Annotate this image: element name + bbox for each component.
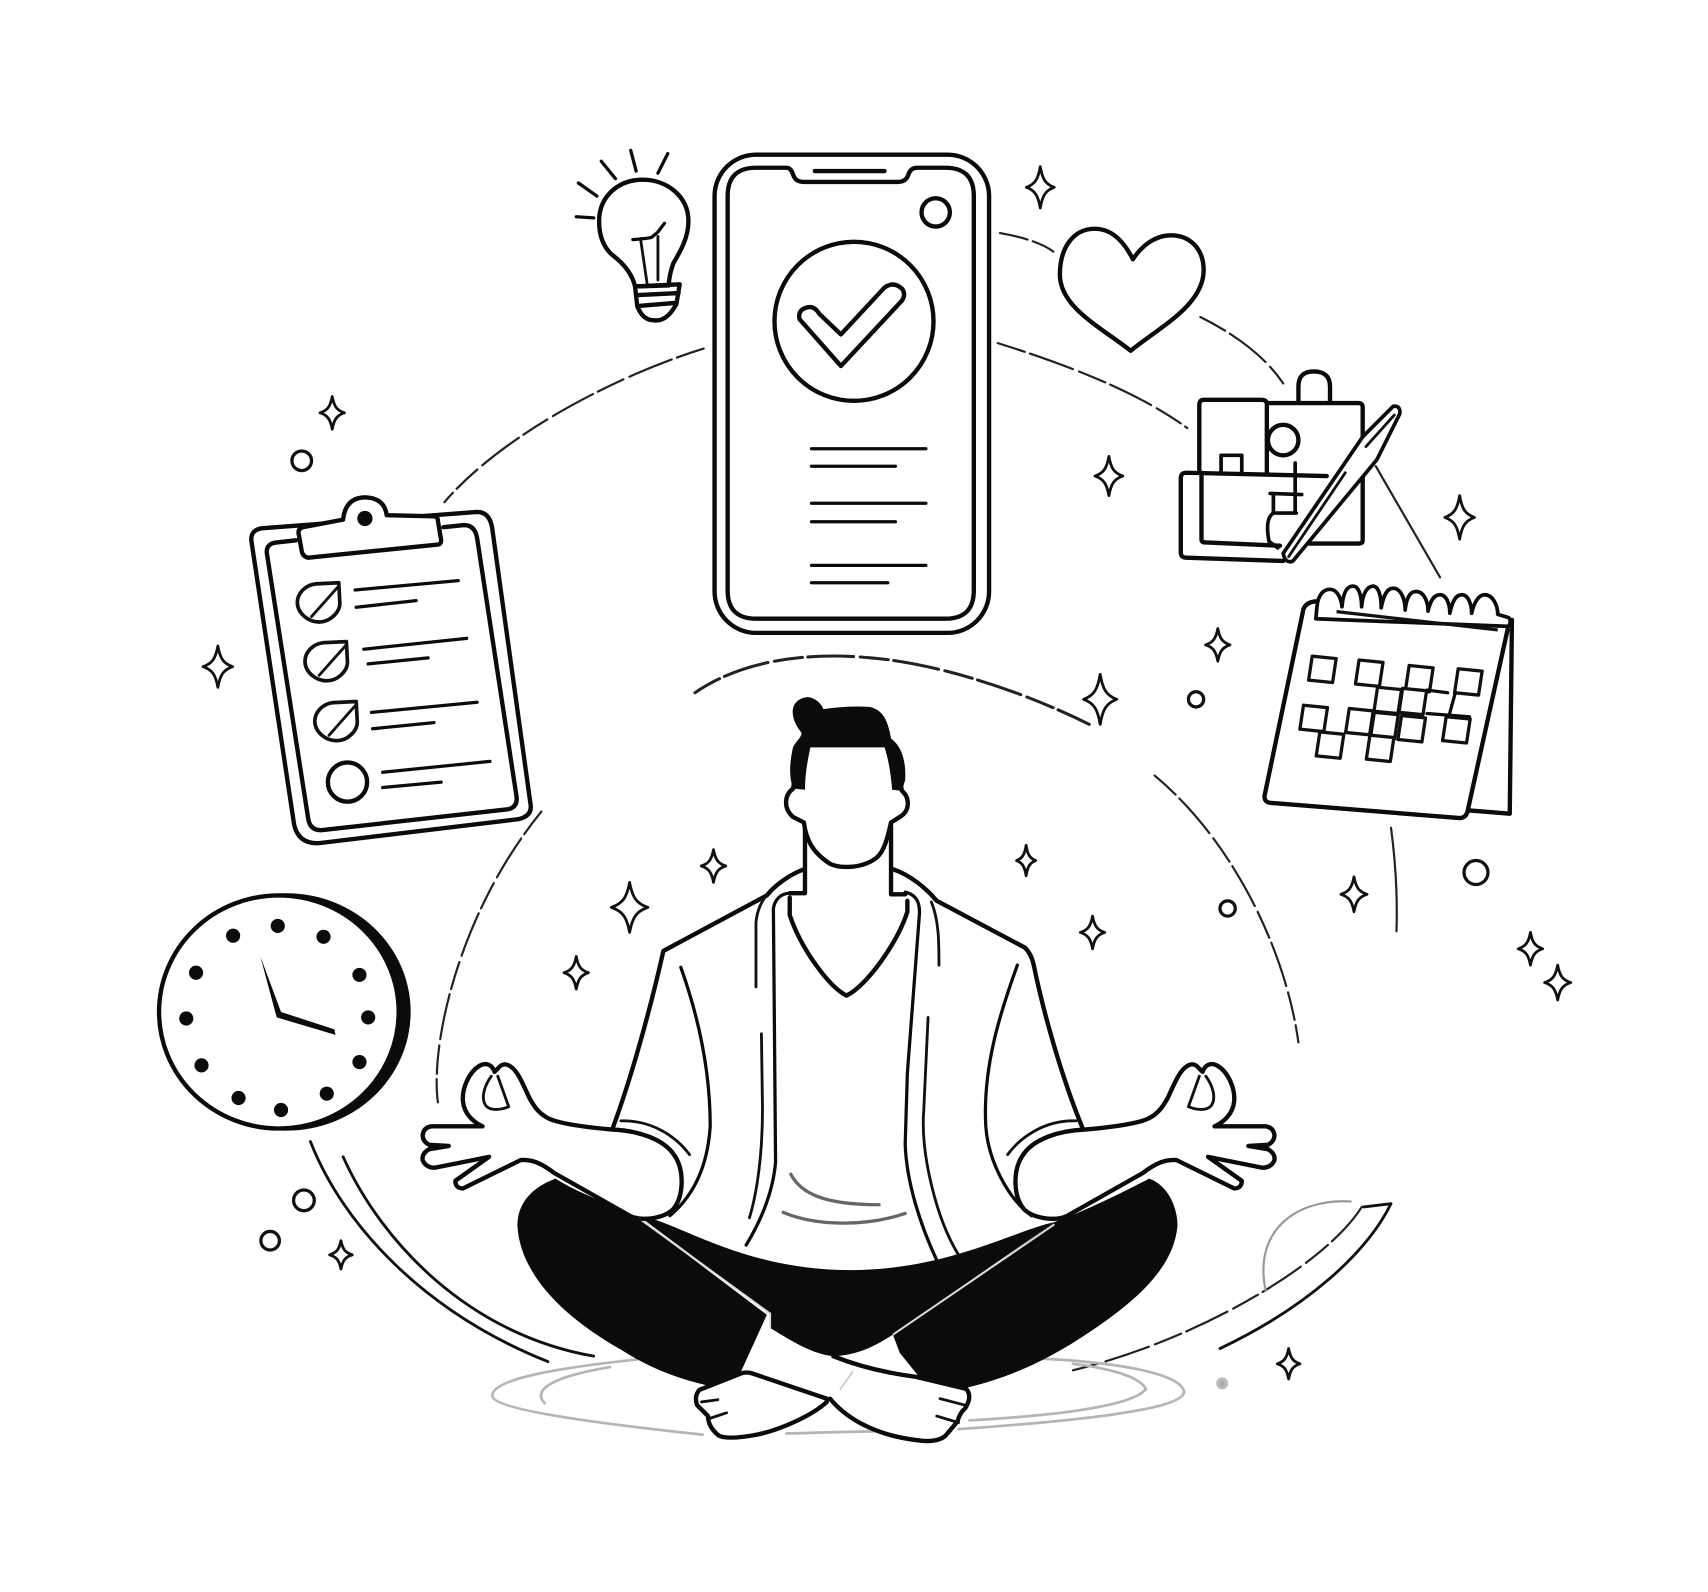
icon: light bulb bbox=[576, 150, 688, 320]
connecting dashed arcs bbox=[310, 233, 1440, 1370]
sparkles bbox=[203, 167, 1571, 1379]
hair bbox=[790, 697, 905, 791]
icon: smartphone with check bbox=[715, 155, 989, 633]
icon: desk calendar bbox=[1265, 586, 1512, 818]
torso and jacket bbox=[566, 869, 1133, 1296]
crossed shins and feet bbox=[696, 1356, 969, 1441]
right hand and forearm bbox=[1008, 1064, 1275, 1219]
icon: organiser pouch with pen bbox=[1181, 371, 1400, 562]
figure: meditating person bbox=[423, 697, 1275, 1441]
icon: heart bbox=[1060, 229, 1204, 351]
left hand and forearm bbox=[423, 1064, 690, 1219]
centre of lap bbox=[638, 1216, 1054, 1356]
left leg bbox=[517, 1179, 767, 1386]
small circles bbox=[261, 451, 1488, 1388]
icon: clipboard checklist bbox=[251, 497, 531, 843]
ground ripples bbox=[492, 1358, 1184, 1435]
right leg bbox=[893, 1179, 1178, 1388]
icon: wall clock bbox=[159, 893, 411, 1131]
head and neck bbox=[786, 745, 908, 894]
